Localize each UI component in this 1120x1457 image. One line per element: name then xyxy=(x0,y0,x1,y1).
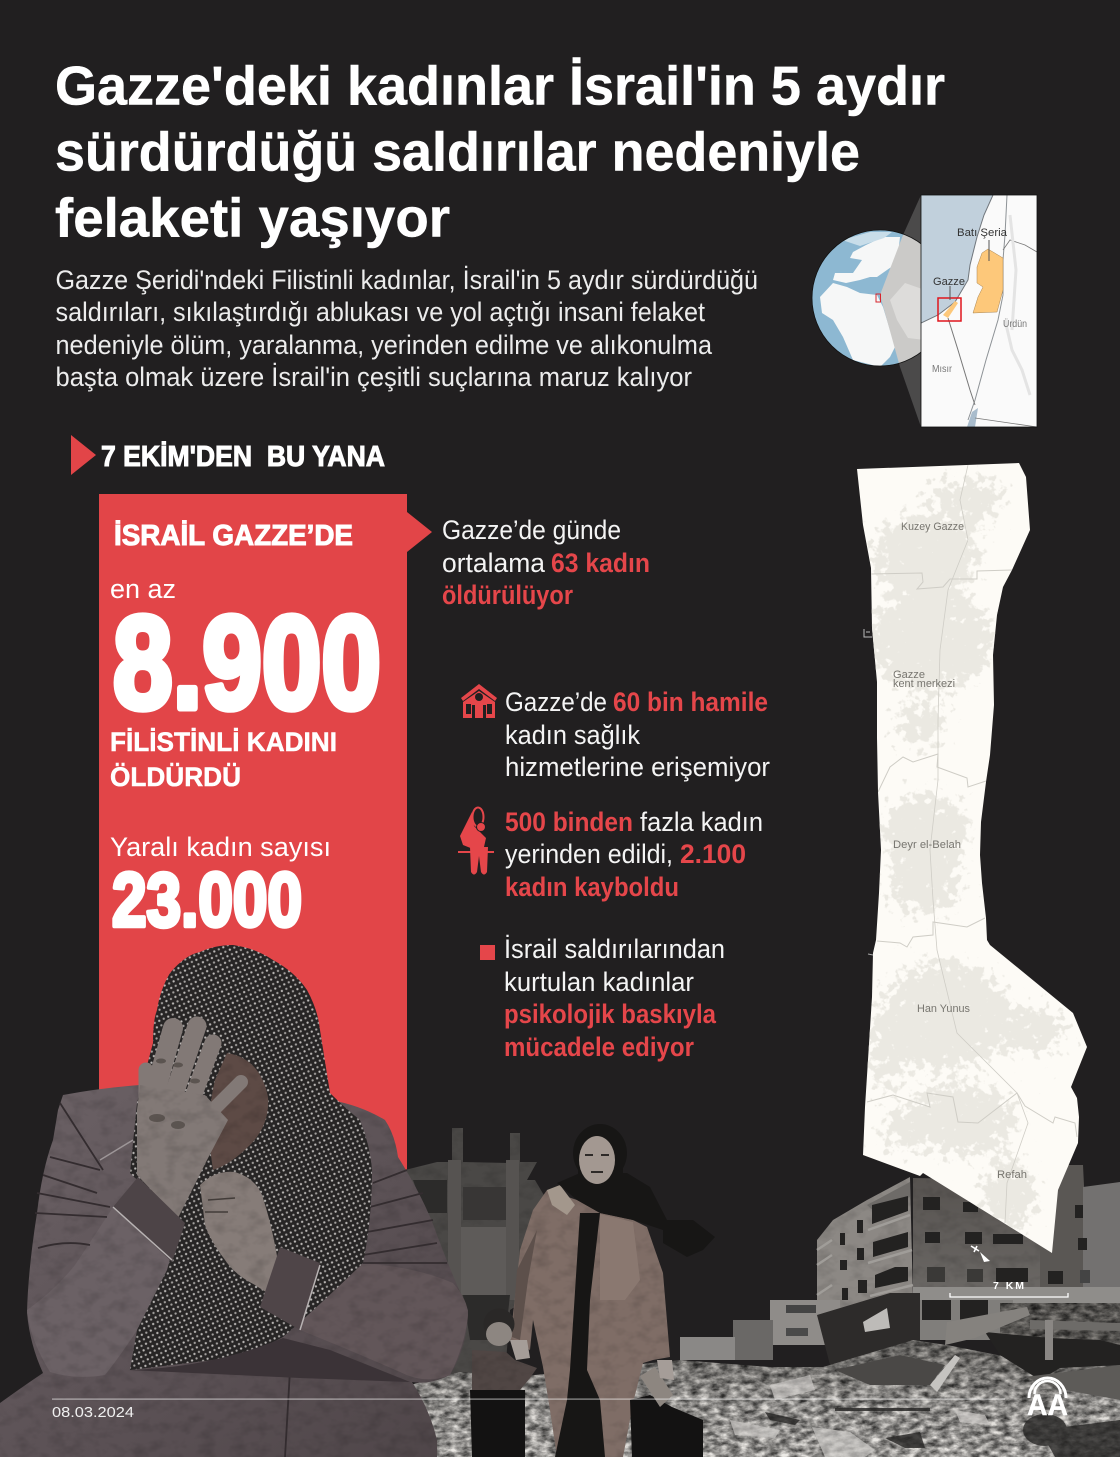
fact: displaced women: fazla kadın xyxy=(640,807,763,837)
scale bar xyxy=(950,1280,1068,1297)
locator globe and inset map xyxy=(812,195,1037,427)
panel: red statistics: ÖLDÜRDÜ xyxy=(110,762,241,792)
map of Gaza Strip: Refah xyxy=(997,1169,1027,1181)
fact: pregnant women: 60 bin hamile xyxy=(613,687,768,717)
bullet xyxy=(480,945,495,960)
fact: psychological pressure: psikolojik baskıyla xyxy=(504,999,717,1029)
map of Gaza Strip xyxy=(850,460,1087,1253)
fact: pregnant women xyxy=(505,687,770,782)
fact: psychological pressure: İsrail saldırılarından xyxy=(504,933,725,964)
map of Gaza Strip: Han Yunus xyxy=(917,1003,970,1015)
fact: killed per day: öldürülüyor xyxy=(442,580,573,610)
panel: red statistics: 23.000 xyxy=(112,858,302,943)
section heading xyxy=(71,435,385,475)
icon: north arrow xyxy=(971,1246,990,1262)
fact: displaced women: 2.100 xyxy=(680,839,746,869)
panel: red statistics: en az xyxy=(110,574,176,604)
locator globe and inset map: Batı Şeria xyxy=(957,227,1008,239)
locator globe and inset map: Gazze xyxy=(933,276,965,288)
fact: displaced women: yerinden edildi, xyxy=(505,839,673,869)
right building block xyxy=(817,1165,1120,1360)
locator globe and inset map: Ürdün xyxy=(1003,318,1027,330)
panel: red statistics: Yaralı kadın sayısı xyxy=(110,832,331,862)
scale bar: 7 KM xyxy=(993,1280,1024,1292)
logo: AA: AA xyxy=(1027,1389,1068,1422)
fact: pregnant women: kadın sağlık xyxy=(505,720,640,750)
panel: red statistics: FİLİSTİNLİ KADINI xyxy=(110,727,337,757)
fact: psychological pressure xyxy=(504,933,725,1062)
collapsed slabs xyxy=(835,1307,1120,1400)
balcony ledges xyxy=(817,1215,913,1296)
icon: mother with baby xyxy=(458,808,494,874)
title: sürdürdüğü saldırılar nedeniyle xyxy=(55,120,860,182)
title: felaketi yaşıyor xyxy=(55,186,450,248)
intro text xyxy=(56,264,758,392)
windows and balconies xyxy=(840,1196,1090,1320)
ruined building left xyxy=(405,1128,545,1375)
title: Gazze'deki kadınlar İsrail'in 5 aydır xyxy=(55,54,945,116)
distant shops xyxy=(680,1300,840,1360)
intro text: nedeniyle ölüm, yaralanma, yerinden edilme ve alıkonulma xyxy=(56,330,713,360)
section heading: 7 EKİM'DEN BU YANA xyxy=(101,441,385,473)
date: 08.03.2024 xyxy=(52,1405,134,1421)
panel: red statistics xyxy=(99,494,432,1170)
fact: killed per day: 63 kadın xyxy=(551,548,650,578)
ruined street photo xyxy=(405,1128,1120,1457)
map of Gaza Strip: kent merkezi xyxy=(893,678,955,690)
intro text: başta olmak üzere İsrail'in çeşitli suçlarına maruz kalıyor xyxy=(56,361,692,392)
map of Gaza Strip: Deyr el-Belah xyxy=(893,839,961,851)
fact: displaced women: 500 binden xyxy=(505,807,633,837)
photo: grieving woman xyxy=(0,945,468,1457)
title xyxy=(55,54,945,248)
fact: psychological pressure: mücadele ediyor xyxy=(504,1032,694,1062)
map of Gaza Strip: Gazze xyxy=(893,669,925,681)
fact: psychological pressure: kurtulan kadınlar xyxy=(504,967,694,997)
fact: pregnant women: hizmetlerine erişemiyor xyxy=(505,752,770,782)
intro text: Gazze Şeridi'ndeki Filistinli kadınlar, İsrail'in 5 aydır sürdürdüğü xyxy=(56,264,758,295)
rubble shards xyxy=(730,1375,990,1457)
icon: health house xyxy=(461,684,497,718)
intro text: saldırıları, sıkılaştırdığı ablukası ve yol açtığı insani felaket xyxy=(56,297,705,327)
footer rule xyxy=(52,1398,1005,1400)
fact: pregnant women: Gazze’de xyxy=(505,687,607,717)
locator globe and inset map: Mısır xyxy=(932,364,953,375)
panel: red statistics: İSRAİL GAZZE’DE xyxy=(114,520,353,552)
fact: displaced women: kadın kayboldu xyxy=(505,872,679,902)
fact: displaced women xyxy=(505,807,763,902)
fact: killed per day xyxy=(442,515,650,610)
panel: red statistics: 8.900 xyxy=(113,589,381,736)
fact: killed per day: Gazze’de günde xyxy=(442,515,621,545)
fact: killed per day: ortalama xyxy=(442,548,546,578)
map of Gaza Strip: Kuzey Gazze xyxy=(901,521,964,533)
shopfront xyxy=(817,1293,920,1365)
photo: woman with child xyxy=(470,1124,715,1457)
